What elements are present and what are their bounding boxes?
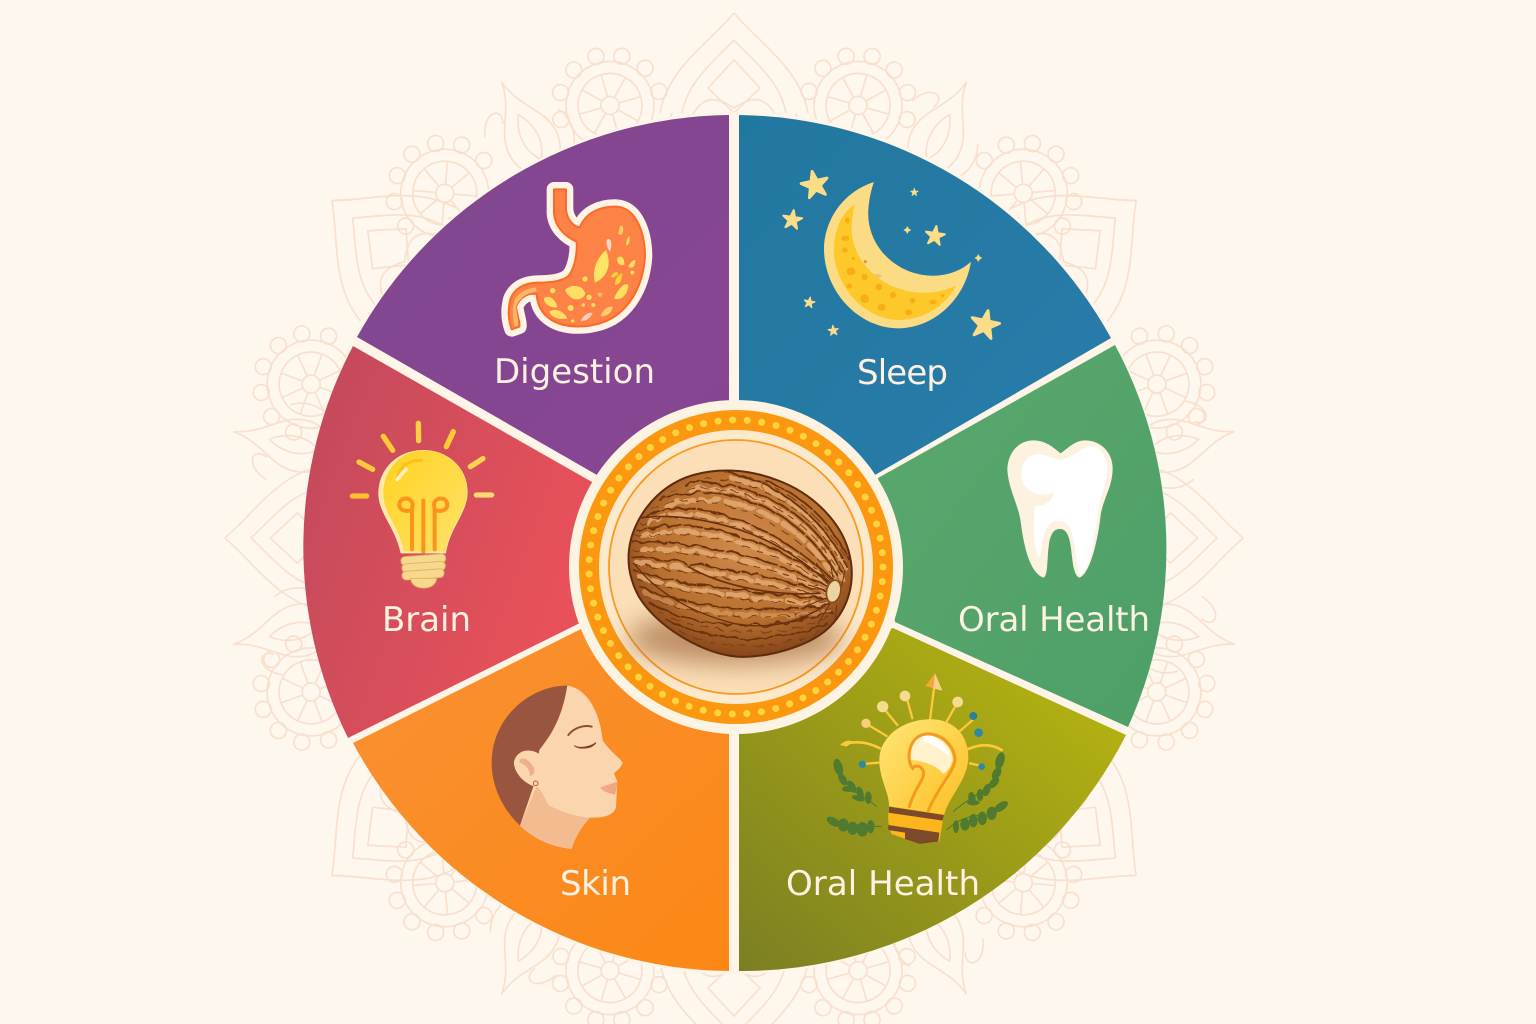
- panel: oral health green: [878, 345, 1166, 727]
- wedge: blue: [739, 115, 1111, 510]
- label: Brain: Brain: [382, 600, 471, 640]
- label: Oral Health: Oral Health: [958, 600, 1150, 640]
- central medallion: [569, 400, 903, 734]
- icon: stomach: [509, 189, 645, 329]
- infographic: nutmeg benefits wheel: [224, 12, 1244, 1024]
- wedge: green: [878, 345, 1166, 727]
- disc: inner background: [599, 430, 873, 704]
- icon: light bulb with rays: [352, 423, 492, 588]
- label: Skin: Skin: [560, 864, 631, 904]
- ring: orange dotted band: [579, 410, 893, 724]
- icon: tooth: [1007, 440, 1113, 578]
- panel: digestion: [357, 115, 729, 510]
- panel: oral health olive: [739, 628, 1126, 971]
- label: Sleep: Sleep: [857, 353, 948, 393]
- wedge: red: [303, 346, 592, 738]
- panel: skin: [353, 628, 729, 971]
- panel: brain: [303, 346, 592, 738]
- illustration: nutmeg seed: [629, 470, 852, 657]
- background mandala: [224, 13, 1244, 1024]
- label: Oral Health: Oral Health: [786, 864, 980, 904]
- nut shadow: [627, 612, 843, 664]
- wedge: orange: [353, 628, 729, 971]
- panel: sleep: [739, 115, 1111, 510]
- wheel base: [304, 112, 1166, 974]
- icon: woman's profile: [492, 686, 623, 849]
- icon: crescent moon and stars: [782, 169, 1002, 339]
- label: Digestion: Digestion: [494, 352, 655, 392]
- ring: cream border: [569, 400, 903, 734]
- wedge: olive: [739, 628, 1126, 971]
- wedge: purple: [357, 115, 729, 510]
- icon: glowing bulb with sprigs: [825, 673, 1010, 844]
